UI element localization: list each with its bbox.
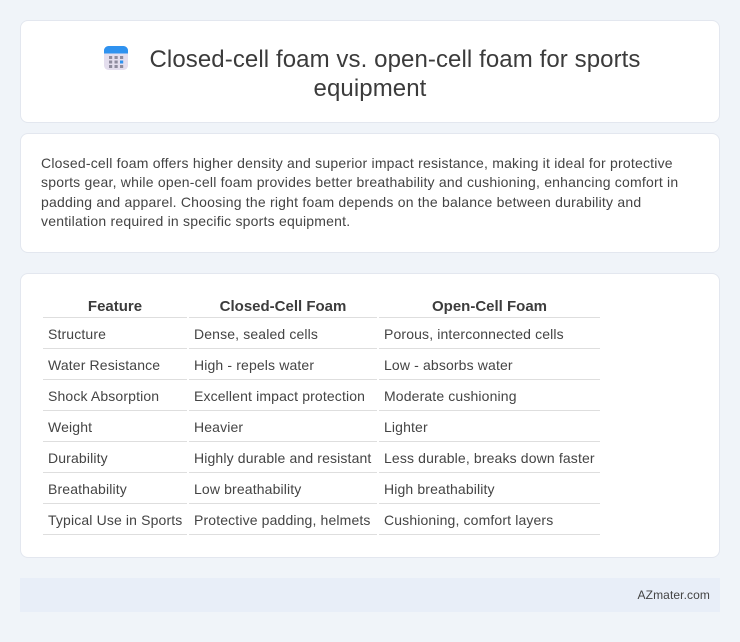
comparison table: Excellent impact protection [194,388,365,404]
comparison table: Weight [48,419,92,435]
comparison table: Shock Absorption [48,388,159,404]
heading: Closed-cell foam vs. open-cell foam for sports [150,46,640,73]
footer bar [20,578,720,612]
comparison table: Highly durable and resistant [194,450,371,466]
comparison table: Protective padding, helmets [194,512,371,528]
comparison table: Low breathability [194,481,301,497]
comparison table: Lighter [384,419,428,435]
summary text: Closed-cell foam offers higher density and superior impact resistance, making it ideal for protective [41,155,673,171]
comparison table: Feature [88,298,142,315]
comparison table: High - repels water [194,357,314,373]
comparison table: Dense, sealed cells [194,326,318,342]
comparison table: Low - absorbs water [384,357,513,373]
comparison table card [20,273,720,558]
summary card [20,133,720,253]
footer credit: AZmater.com [638,588,710,602]
summary text [41,155,678,229]
comparison table: Closed-Cell Foam [220,298,346,315]
summary text: sports gear, while open-cell foam provides better breathability and cushioning, enhancing comfort in [41,174,678,190]
comparison table: Durability [48,450,108,466]
comparison table: High breathability [384,481,495,497]
comparison table: Water Resistance [48,357,160,373]
summary text: ventilation required in specific sports equipment. [41,213,350,229]
heading [150,46,640,102]
heading: equipment [314,75,426,102]
comparison table: Less durable, breaks down faster [384,450,595,466]
comparison table: Porous, interconnected cells [384,326,564,342]
icon: calendar [104,46,128,70]
title card [20,20,720,123]
comparison table: Breathability [48,481,127,497]
comparison table [43,298,600,535]
comparison table: Cushioning, comfort layers [384,512,553,528]
comparison table: Open-Cell Foam [432,298,547,315]
comparison table: Structure [48,326,106,342]
comparison table: Typical Use in Sports [48,512,182,528]
comparison table: Heavier [194,419,243,435]
summary text: padding and apparel. Choosing the right foam depends on the balance between durability and [41,194,641,210]
comparison table: Moderate cushioning [384,388,517,404]
